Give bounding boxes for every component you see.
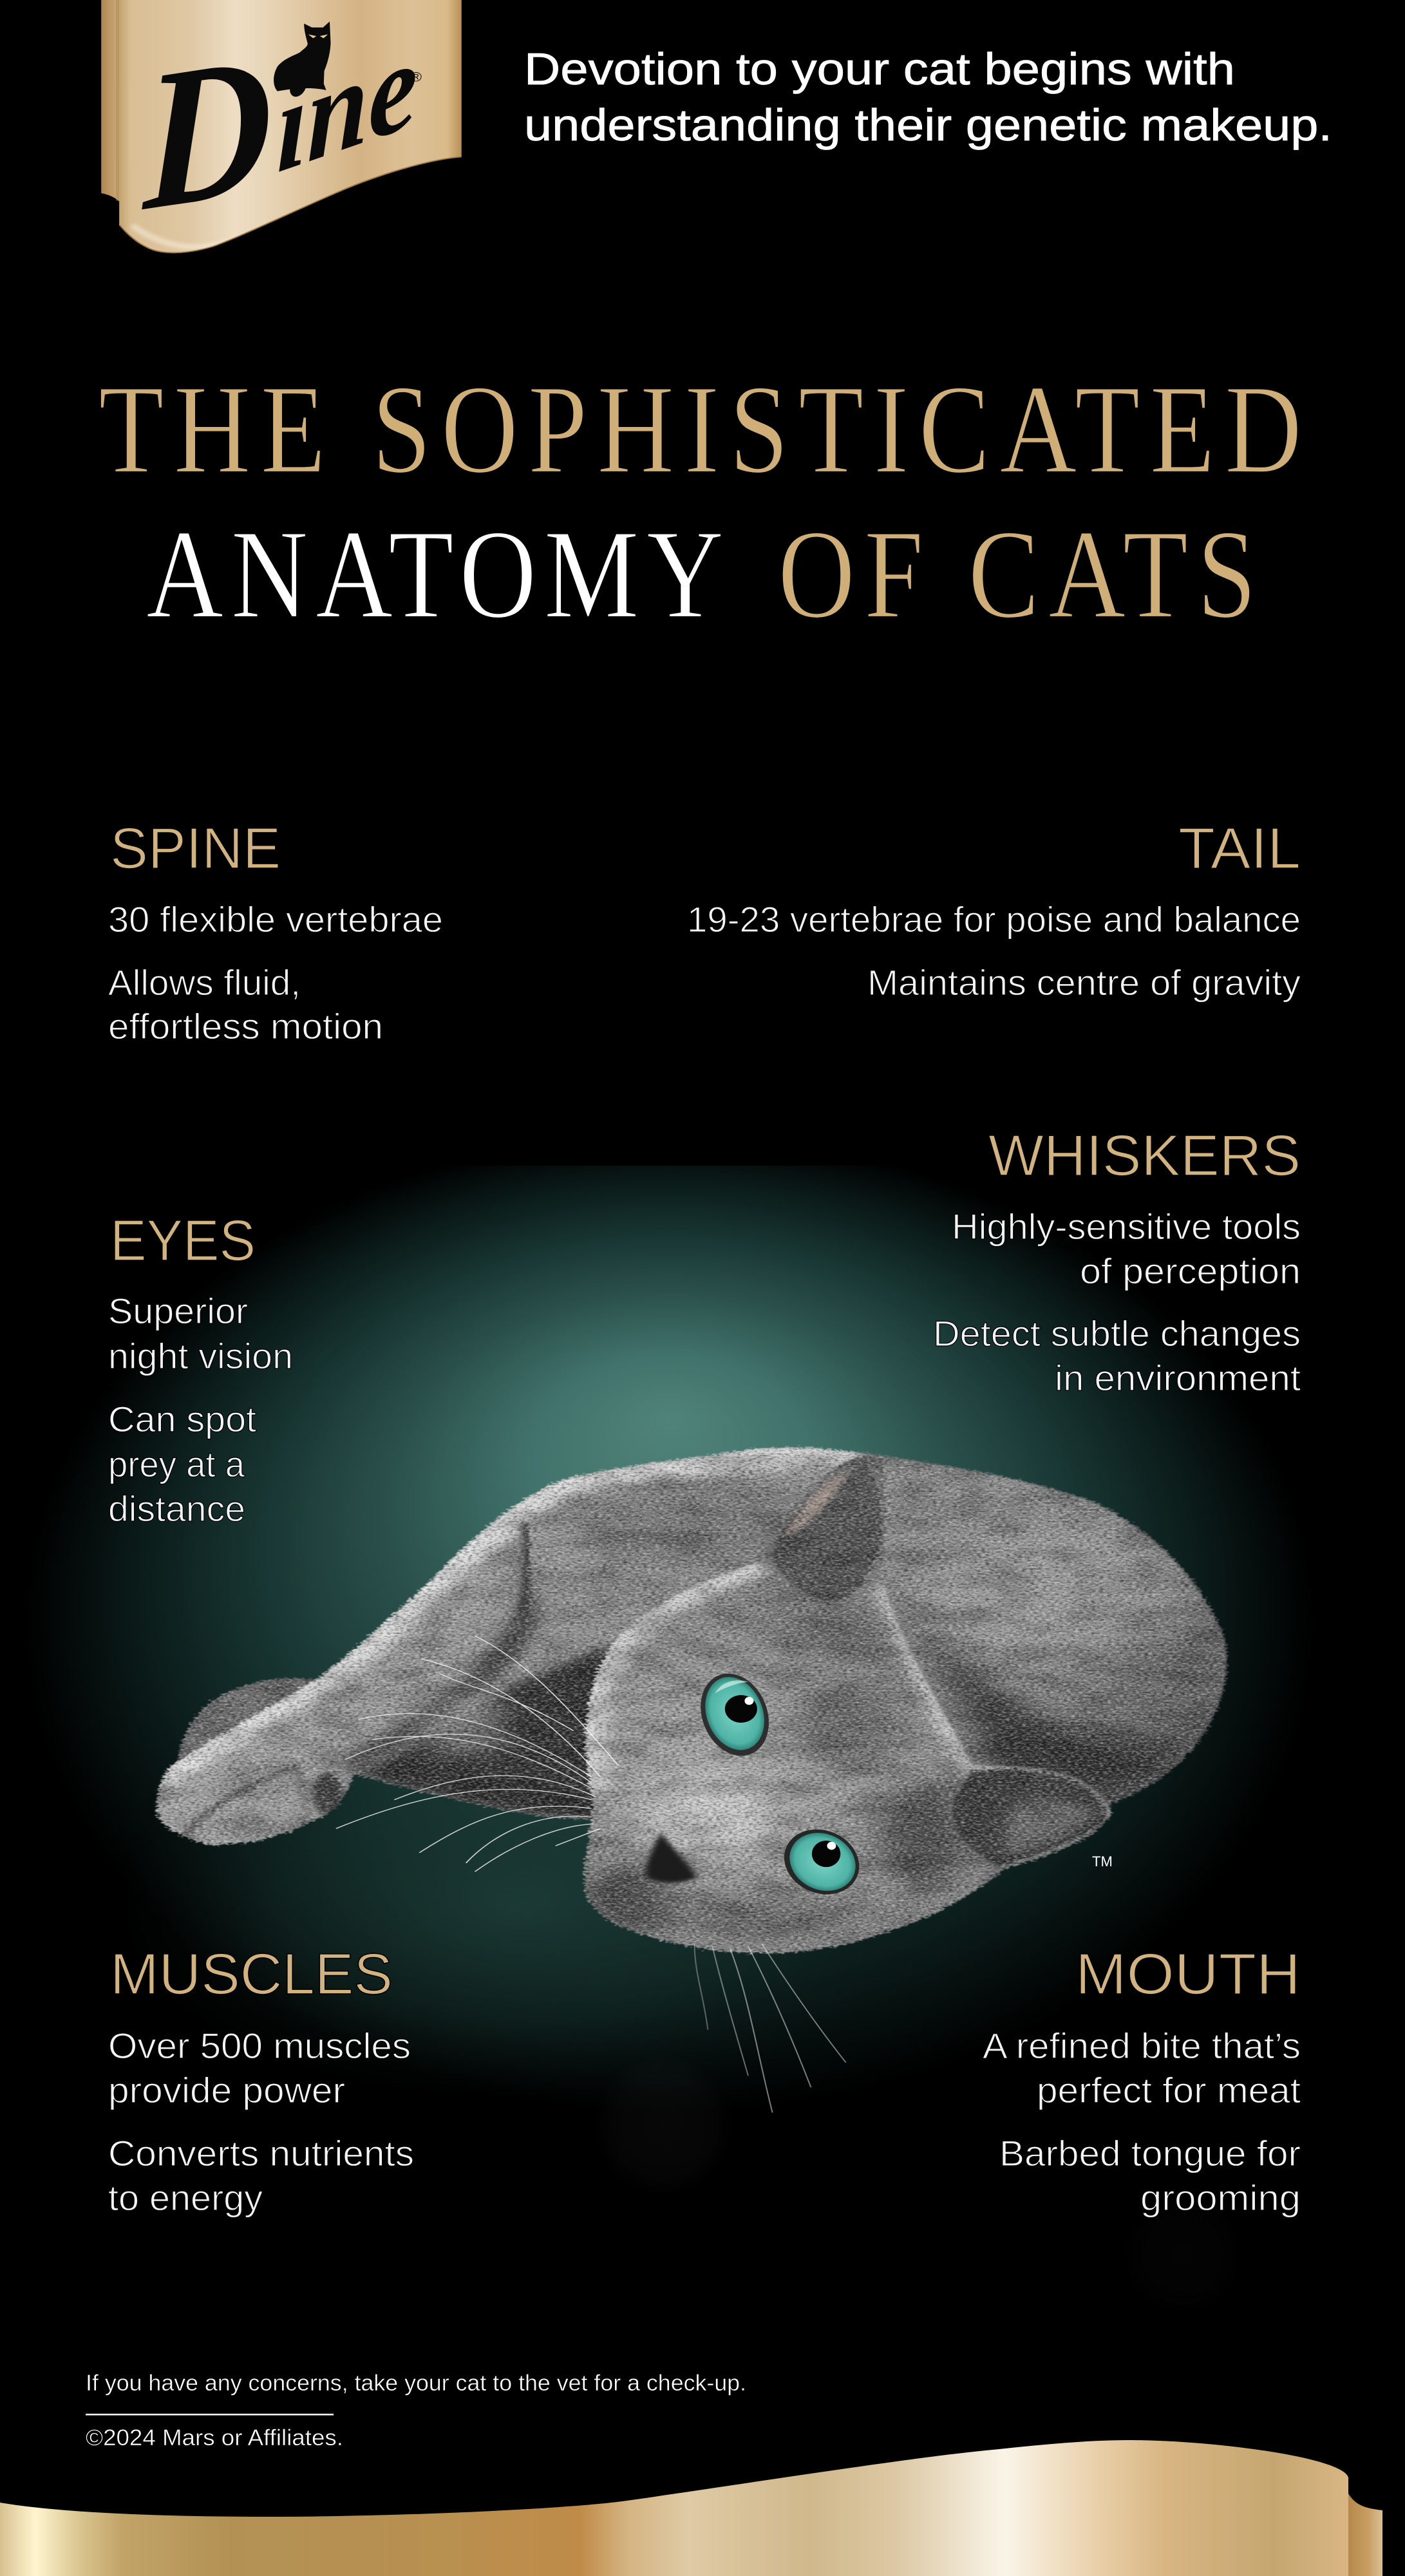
text: muscles facts: Converts nutrients (108, 2133, 414, 2174)
heading: eyes: EYES (110, 1209, 256, 1273)
illustration: grey cat lying on its side (156, 1448, 1227, 2112)
wordmark (140, 10, 417, 253)
text: mouth facts: perfect for meat (1037, 2070, 1301, 2110)
gold ribbon at bottom (0, 2440, 1382, 2576)
eye: upper (693, 1671, 777, 1759)
lower ear inside (952, 1769, 1106, 1866)
registered mark: ® (411, 70, 422, 84)
trademark mark: TM (1092, 1853, 1113, 1870)
panel: spine (108, 817, 443, 1046)
eye: lower (775, 1825, 868, 1899)
text: muscles facts: Over 500 muscles (108, 2025, 411, 2066)
paw toes (184, 1765, 306, 1843)
text: spine facts: 30 flexible vertebrae (108, 899, 443, 940)
teal spotlight glow behind cat (0, 1166, 1405, 2315)
tagline: Devotion to your cat begins with (524, 44, 1235, 94)
whiskers (336, 1636, 846, 2112)
text: whiskers facts: Detect subtle changes (933, 1313, 1301, 1354)
rear paw behind leg (178, 1678, 327, 1771)
logo: gold ribbon with Dine wordmark (101, 0, 462, 253)
head with ears (583, 1455, 1111, 1953)
panel: mouth (983, 1942, 1301, 2218)
panel: eyes (108, 1209, 293, 1529)
title: ANATOMY (146, 503, 724, 645)
heading: muscles: MUSCLES (110, 1942, 393, 2007)
copyright: ©2024 Mars or Affiliates. (86, 2425, 343, 2450)
text: eyes facts: Can spot (108, 1399, 256, 1439)
text: eyes facts: night vision (108, 1336, 293, 1376)
text: whiskers facts (933, 1206, 1301, 1398)
text: mouth facts: Barbed tongue for (999, 2133, 1301, 2174)
tagline: understanding their genetic makeup. (524, 100, 1332, 150)
text: eyes facts: prey at a (108, 1444, 245, 1484)
dark markings (798, 1676, 896, 1768)
text: spine facts (108, 899, 443, 1046)
upper ear inside (773, 1466, 882, 1601)
text: whiskers facts: Highly-sensitive tools (952, 1206, 1301, 1247)
heading: spine: SPINE (110, 817, 281, 881)
nose (646, 1833, 697, 1883)
text: whiskers facts: of perception (1080, 1251, 1301, 1291)
text: whiskers facts: in environment (1055, 1358, 1301, 1398)
cat silhouette on logo (274, 21, 331, 91)
text: mouth facts (983, 2025, 1301, 2218)
panel: tail (687, 817, 1301, 1003)
tagline (524, 44, 1332, 150)
shadow on upper arm (346, 1564, 538, 1774)
text: eyes facts: distance (108, 1488, 245, 1529)
panel: whiskers (933, 1124, 1301, 1398)
heading: whiskers: WHISKERS (988, 1124, 1301, 1188)
text: muscles facts (108, 2025, 414, 2218)
text: mouth facts: A refined bite that’s (983, 2025, 1301, 2066)
dark belly between leg and face (354, 1645, 618, 1823)
wordmark: ine (276, 10, 417, 200)
light rim on forehead (591, 1564, 762, 1788)
text: spine facts: Allows fluid, (108, 962, 301, 1003)
ribbon (101, 0, 462, 253)
heading: mouth: MOUTH (1075, 1942, 1301, 2007)
text: tail facts: 19-23 vertebrae for poise and balance (687, 899, 1301, 940)
title: OF CATS (778, 503, 1256, 645)
title: THE SOPHISTICATED (99, 358, 1302, 500)
wordmark: D (140, 12, 272, 253)
dark patch on flank (896, 1587, 1210, 1806)
panel: muscles (108, 1942, 414, 2218)
text: muscles facts: provide power (108, 2070, 345, 2110)
heading: tail: TAIL (1178, 817, 1301, 881)
text: mouth facts: grooming (1140, 2177, 1301, 2218)
text: eyes facts: Superior (108, 1291, 248, 1331)
title (99, 358, 1302, 645)
text: spine facts: effortless motion (108, 1006, 383, 1046)
muzzle highlight (650, 1774, 784, 1855)
body and front leg (156, 1448, 1227, 1875)
text: muscles facts: to energy (108, 2177, 263, 2218)
text: tail facts: Maintains centre of gravity (867, 962, 1301, 1003)
bright rim of the leg (161, 1455, 860, 1777)
text: eyes facts (108, 1291, 293, 1529)
footer note: If you have any concerns, take your cat to the vet for a check-up. (86, 2371, 746, 2396)
text: tail facts (687, 899, 1301, 1003)
